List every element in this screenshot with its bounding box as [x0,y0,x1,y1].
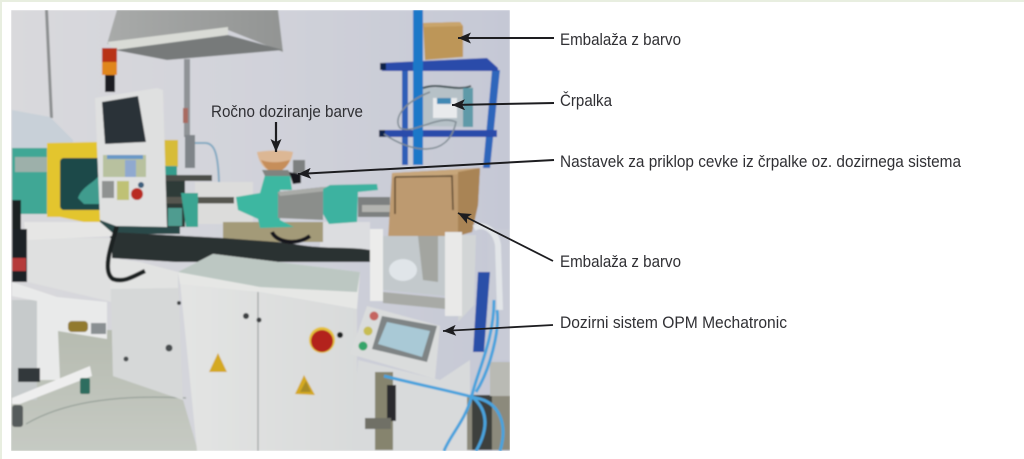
wall [11,10,510,451]
signal tower [102,48,117,92]
right side wall strip [488,229,510,360]
callout: Nastavek za priklop cevke: Nastavek za priklop cevke iz črpalke oz. dozirnega sistema [560,153,962,171]
rear wall gap behind nozzle [195,182,253,224]
callout: Ročno doziranje barve: Ročno doziranje barve [211,103,363,121]
pneumatic sensor [185,135,195,168]
callout: Nastavek za priklop cevke [298,153,962,174]
large white machine base [63,237,114,300]
injection unit [162,175,390,228]
green machine section [12,148,48,214]
yellow post [163,140,178,167]
plastic bags at left [12,110,73,148]
main electrical cabinet [178,254,360,451]
pedestal [352,360,470,451]
dark cable [108,226,145,280]
beige box under injection unit [223,222,323,242]
callout: Embalaža z barvo (top): Embalaža z barvo [560,31,681,49]
blue pneumatic tubes [384,300,503,451]
floor [11,330,198,451]
connector nozzle [262,170,292,176]
callout: Embalaža z barvo (lower) [458,213,681,271]
dark tray and cables [110,232,370,262]
hood support pole [184,59,190,137]
bag below trolley [12,300,37,400]
touch-screen controller [350,306,440,379]
yellow clamp unit [46,141,101,223]
large colour box [388,168,480,240]
colour box on top shelf [423,22,463,60]
emergency stop switch [309,327,335,353]
blue shelf rack [379,10,500,168]
lower machine frame [98,220,181,236]
machine control panel [95,88,167,227]
callout: Dozirni sistem OPM Mechatronic [443,314,787,332]
callout: Črpalka: Črpalka [560,91,613,110]
white wall strip behind tray [320,222,370,252]
callout: Dozirni sistem OPM Mechatronic: Dozirni sistem OPM Mechatronic [560,314,787,332]
pneumatic equipment [365,226,510,450]
photo: injection moulding machine with dosing system [11,10,510,451]
callout: Embalaža z barvo (lower): Embalaža z barvo [560,253,681,271]
dark left edge with red stop [12,229,27,282]
dosing unit housing [370,229,476,322]
left wall pipe [45,10,53,118]
funnel for manual colour dosing [257,150,293,172]
peristaltic pump [384,86,473,149]
extraction hood [107,10,283,60]
lower machine cabinet [110,258,183,400]
white trolley [12,282,107,427]
